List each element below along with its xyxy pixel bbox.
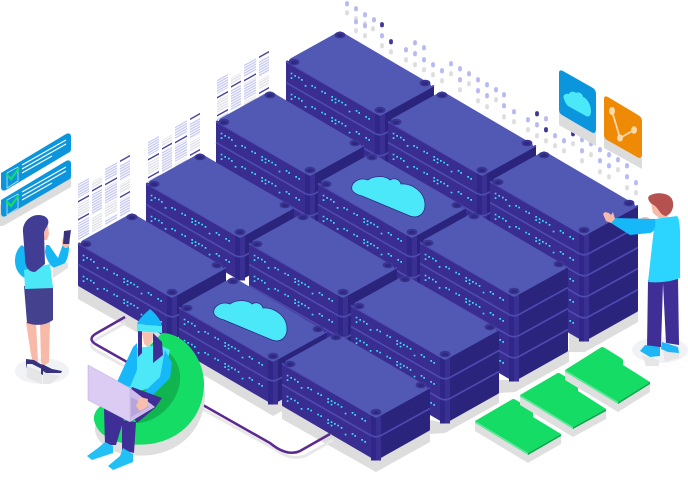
server row 1, stack 3 xyxy=(282,334,430,460)
head xyxy=(651,203,668,219)
data sheet: left xyxy=(78,155,130,241)
cloud app tile xyxy=(559,70,596,146)
beanbag xyxy=(94,333,204,445)
network app tile xyxy=(604,96,642,169)
sleeve left xyxy=(117,343,137,387)
face xyxy=(142,332,153,347)
check item upper xyxy=(1,133,71,191)
high heel shoes xyxy=(26,359,62,375)
neck and face xyxy=(42,225,49,240)
arm shadow xyxy=(53,262,68,278)
ground ellipse xyxy=(15,358,69,384)
server row 4, stack 3 xyxy=(490,152,638,342)
server row 4, stack 1 xyxy=(286,32,434,180)
back hand xyxy=(640,217,650,223)
man seated on beanbag xyxy=(87,309,205,470)
checklist tiles xyxy=(0,133,71,226)
folder 3 xyxy=(565,347,650,412)
left arm xyxy=(15,245,30,279)
data sheet: middle xyxy=(148,113,200,199)
keyboard xyxy=(131,397,149,417)
shirt xyxy=(648,216,680,282)
hair xyxy=(648,193,673,216)
sleeve right xyxy=(143,350,172,398)
server row 1, stack 1 xyxy=(78,214,226,340)
woman with phone xyxy=(15,215,71,384)
folder 2 xyxy=(520,373,606,437)
check item lower xyxy=(1,160,71,217)
data sheet: right xyxy=(217,51,269,137)
right arm xyxy=(45,244,69,268)
pants xyxy=(647,278,679,348)
hair strands xyxy=(138,330,163,363)
beanbag fold xyxy=(125,350,180,423)
dark lap xyxy=(125,387,162,423)
beanie xyxy=(137,309,162,326)
server row 4, stack 2 xyxy=(388,92,536,260)
hand xyxy=(603,212,615,223)
legs xyxy=(104,408,125,445)
server row 1, stack 2 xyxy=(179,278,327,404)
data dot grid xyxy=(347,3,636,194)
chair shadow xyxy=(95,344,205,456)
cable shadow xyxy=(92,323,333,457)
server row 3, stack 3 xyxy=(420,213,568,382)
legs xyxy=(26,322,50,366)
top xyxy=(24,264,53,289)
server row 2, stack 1 xyxy=(146,154,294,280)
laptop screen xyxy=(88,365,130,422)
cloud on server xyxy=(352,177,425,217)
hand xyxy=(136,397,148,411)
hoodie xyxy=(118,345,170,392)
hand and phone xyxy=(62,236,70,248)
floor shadows under server stacks xyxy=(78,285,638,472)
man at the servers xyxy=(603,193,688,366)
server row 3, stack 1 xyxy=(216,92,364,240)
cloud on front server xyxy=(214,301,287,341)
folder 1 xyxy=(475,399,561,463)
hair xyxy=(23,215,48,272)
server row 2, stack 3 xyxy=(351,276,499,424)
front arm xyxy=(611,218,655,235)
server row 3, stack 2 xyxy=(318,154,466,302)
ground ellipse xyxy=(632,337,688,363)
skirt xyxy=(24,286,53,325)
shoes xyxy=(87,442,113,460)
network cable xyxy=(92,317,330,453)
server row 2, stack 2 xyxy=(249,214,397,362)
shoes xyxy=(640,345,660,357)
laptop base xyxy=(130,388,155,422)
